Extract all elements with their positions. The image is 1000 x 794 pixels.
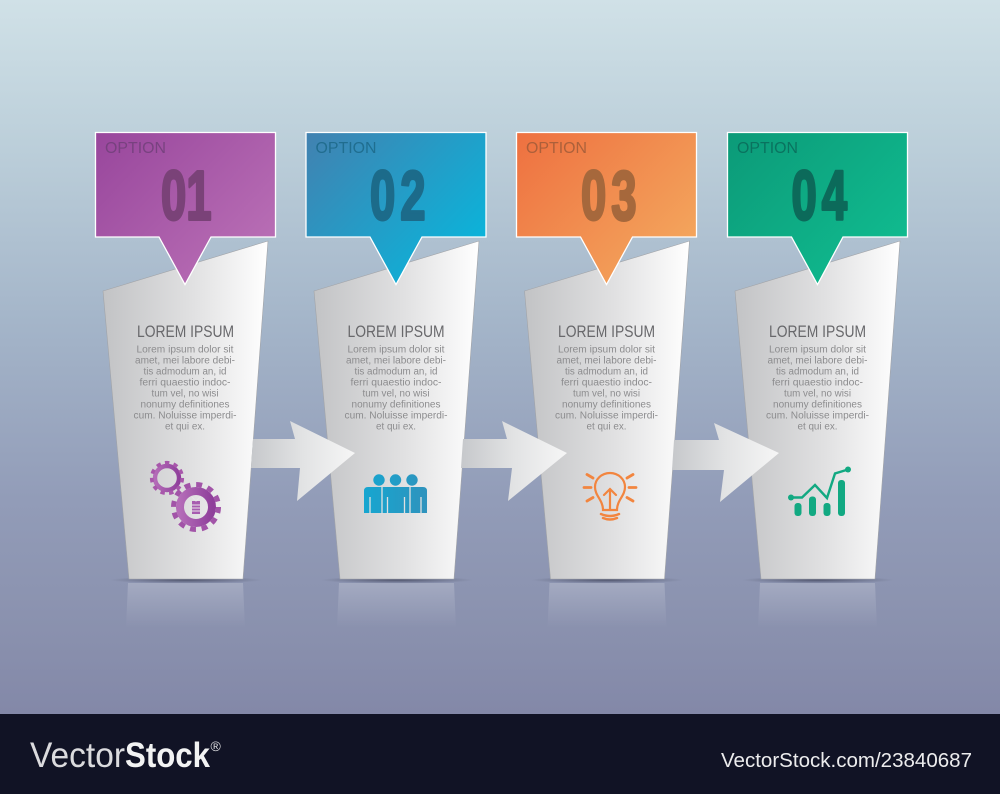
panel: option 01 xyxy=(96,132,276,628)
callout 03 xyxy=(516,132,696,284)
body text 2: amet, mei labore debi- xyxy=(346,356,446,366)
body text 1: amet, mei labore debi- xyxy=(135,356,235,366)
body text 2: ferri quaestio indoc- xyxy=(350,378,442,388)
logo: ® xyxy=(210,738,222,754)
body text 1: tum vel, no wisi xyxy=(152,388,218,400)
logo: Vector xyxy=(30,736,125,775)
footer bar xyxy=(0,714,1000,794)
heading 3: LOREM IPSUM xyxy=(558,323,655,341)
panel: option 02 xyxy=(306,132,486,628)
heading 1: LOREM IPSUM xyxy=(137,323,234,341)
body text 2: tis admodum an, id xyxy=(354,366,438,378)
card 1 xyxy=(103,241,268,579)
icon: growth chart xyxy=(788,466,851,516)
image id: VectorStock.com/23840687 xyxy=(721,750,972,772)
body text 1: et qui ex. xyxy=(165,422,205,432)
body text 2 xyxy=(344,344,448,432)
card 2 xyxy=(314,241,479,579)
heading 2: LOREM IPSUM xyxy=(348,323,444,341)
body text 1: cum. Noluisse imperdi- xyxy=(134,410,236,422)
body text 1 xyxy=(134,344,236,432)
option label 02: OPTION xyxy=(316,140,376,157)
logo: Stock xyxy=(125,736,210,775)
arrow 2 to 3 xyxy=(461,421,567,501)
card 3 xyxy=(524,241,690,579)
arrow 3 to 4 xyxy=(672,423,779,502)
body text 1: Lorem ipsum dolor sit xyxy=(136,344,234,356)
number 03: 03 xyxy=(581,157,642,235)
body text 4: et qui ex. xyxy=(798,422,838,432)
number 01: 01 xyxy=(161,157,212,235)
panel: option 04 xyxy=(728,132,908,628)
icon: gears xyxy=(152,463,218,530)
body text 4: cum. Noluisse imperdi- xyxy=(766,410,869,422)
card reflection 3 xyxy=(548,583,666,628)
body text 3: ferri quaestio indoc- xyxy=(561,378,652,388)
option label 03: OPTION xyxy=(526,140,587,157)
callout 01 xyxy=(96,132,276,284)
body text 3: amet, mei labore debi- xyxy=(556,356,656,366)
callout 02 xyxy=(306,132,486,284)
body text 4: nonumy definitiones xyxy=(773,400,862,410)
body text 4: Lorem ipsum dolor sit xyxy=(769,344,866,356)
option label 04: OPTION xyxy=(737,140,798,157)
body text 2: Lorem ipsum dolor sit xyxy=(348,344,445,356)
body text 4: ferri quaestio indoc- xyxy=(772,378,863,388)
body text 3 xyxy=(555,344,658,432)
body text 2: et qui ex. xyxy=(376,422,416,432)
card 4 xyxy=(735,241,900,579)
body text 3: cum. Noluisse imperdi- xyxy=(555,410,658,422)
number 04: 04 xyxy=(792,157,852,235)
body text 3: Lorem ipsum dolor sit xyxy=(558,344,655,356)
body text 1: nonumy definitiones xyxy=(140,400,230,410)
body text 3: tum vel, no wisi xyxy=(573,388,640,400)
body text 4: tis admodum an, id xyxy=(776,366,859,378)
body text 3: tis admodum an, id xyxy=(565,366,648,378)
body text 4 xyxy=(766,344,869,432)
icon: team xyxy=(364,474,427,514)
number 02: 02 xyxy=(370,157,431,235)
panel: option 03 xyxy=(516,132,696,628)
body text 2: tum vel, no wisi xyxy=(362,388,430,400)
heading 4: LOREM IPSUM xyxy=(769,323,866,341)
card reflection 1 xyxy=(126,583,245,628)
option label 01: OPTION xyxy=(105,140,166,157)
card shadow 3 xyxy=(532,576,684,584)
body text 4: amet, mei labore debi- xyxy=(768,356,868,366)
body text 3: nonumy definitiones xyxy=(562,400,651,410)
callout 04 xyxy=(728,132,908,284)
card shadow 1 xyxy=(110,576,262,584)
body text 2: nonumy definitiones xyxy=(352,400,440,410)
arrow 1 to 2 xyxy=(251,421,355,501)
body text 1: tis admodum an, id xyxy=(144,366,226,378)
card reflection 2 xyxy=(337,583,456,628)
card shadow 4 xyxy=(742,576,894,584)
body text 3: et qui ex. xyxy=(586,422,626,432)
body text 2: cum. Noluisse imperdi- xyxy=(344,410,448,422)
body text 4: tum vel, no wisi xyxy=(784,388,851,400)
card shadow 2 xyxy=(321,576,473,584)
card reflection 4 xyxy=(758,583,877,628)
body text 1: ferri quaestio indoc- xyxy=(140,378,230,388)
icon: light bulb xyxy=(584,473,636,520)
logo xyxy=(30,736,222,775)
